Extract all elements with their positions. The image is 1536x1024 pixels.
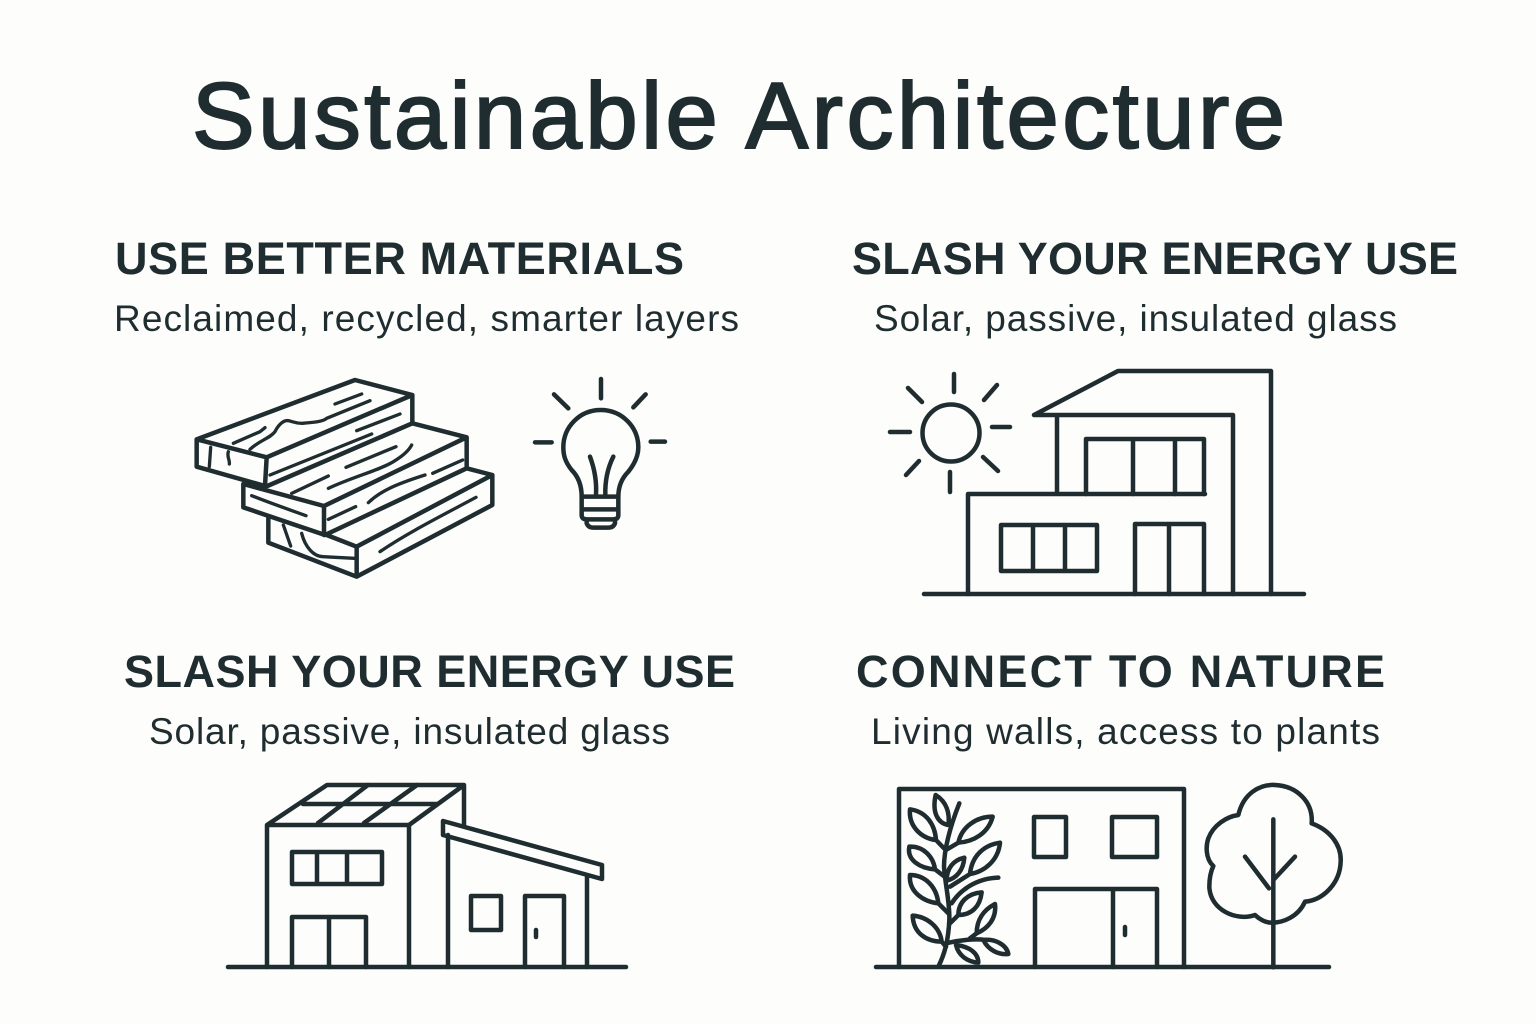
subheading: solar and glass: Solar, passive, insulated glass — [149, 711, 670, 752]
icon: climbing plant — [909, 795, 1008, 967]
icon: tree — [1207, 785, 1341, 967]
icon: sun — [890, 374, 1010, 492]
icon: stacked wood planks — [197, 380, 492, 577]
heading: connect to nature: CONNECT TO NATURE — [856, 646, 1385, 697]
heading: use better materials: USE BETTER MATERIALS — [115, 233, 684, 284]
subheading: materials: Reclaimed, recycled, smarter layers — [114, 298, 739, 339]
panel: slash your energy use, solar roof house — [124, 646, 735, 967]
icon: house with solar panels — [228, 785, 626, 967]
subheading: living walls: Living walls, access to plants — [871, 711, 1380, 752]
icon: light bulb — [535, 379, 665, 528]
panel: use better materials — [114, 233, 739, 577]
heading: slash your energy use: SLASH YOUR ENERGY USE — [124, 646, 735, 697]
panel: connect to nature — [856, 646, 1385, 967]
panel: slash your energy use, sun house — [852, 233, 1458, 594]
icon: building with living wall — [876, 789, 1329, 967]
icon: modern house with large windows — [924, 371, 1304, 594]
title: Sustainable Architecture — [192, 63, 1285, 168]
heading: slash your energy use: SLASH YOUR ENERGY USE — [852, 233, 1458, 284]
subheading: solar and glass: Solar, passive, insulated glass — [874, 298, 1397, 339]
